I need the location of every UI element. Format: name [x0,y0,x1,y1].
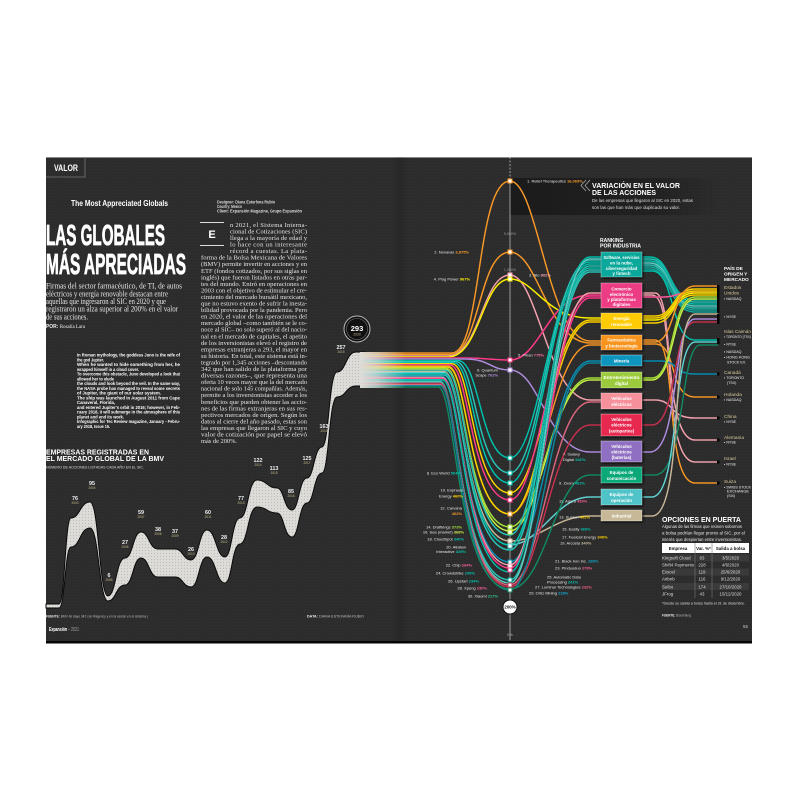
article text: lo hace con un interesante [230,242,307,249]
chart value labels: 125 [302,456,312,462]
table: upcoming listings: Exscel [662,570,675,575]
article text: pectivos mercados de orígen. Según los [201,412,307,419]
country and market labels: EXCHANGE [727,490,750,494]
table: upcoming listings: Empresa [669,546,688,551]
credits text: Designer: Diana Esterlona Rubio [217,200,275,204]
chart value labels: 76 [72,496,78,502]
article text: forma de la Bolsa Mexicana de Valores [201,255,307,262]
title [46,220,186,281]
article text: (BMV) permite invertir en acciones y en [201,261,308,268]
company labels: 29. Ortiz Mining 228% [529,590,569,596]
article text: oferta 10 veces mayor que la del mercado [201,379,307,386]
chart heading: NÚMERO DE ACCIONES LISTADAS CADA AÑO EN EL SIC. [46,464,144,470]
heading: opciones en puerta: Algunas de las firmas que reúnen sobornos [662,524,743,529]
heading: opciones en puerta: interés que despiertan entre inversionistas. [662,537,742,542]
company labels: 13. Sunrun 402% [559,514,590,520]
table: upcoming listings: 27/10/2020 [720,585,742,590]
box: software: Software, servicios [604,255,640,260]
chart value labels: 2014 [254,463,262,467]
credits text: Client: Expansión Magazine, Grupo Expansión [217,208,302,214]
box: farmaceutica: Farmacéutica [607,338,636,342]
article text: inglés) que fueron listados en otras par- [201,274,307,281]
article text: cimiento del mercado bursátil mexicano, [201,294,307,301]
chart value labels: 2015 [270,471,278,475]
company labels: 17. Fuelcell Energy 340% [562,534,608,540]
box: comercio: digitales [613,302,631,307]
company labels: 30. Xiaomi 217% [468,594,498,598]
article text: ETF (fondos cotizados, por sus siglas en [201,268,308,275]
box: equipos de operacion: operación [611,498,632,503]
table: upcoming listings: 174 [698,585,706,590]
standfirst text: eléctricos y energía renovable destacan entre [46,290,168,298]
note text block: and entered Jupiter's orbit in 2016; however, in Feb- [77,405,181,410]
article text: las empresas que llegaron al SIC y cuyo [201,425,307,432]
company labels: 5. Pinan 775% [518,352,544,358]
chart value labels: 27 [122,540,128,546]
flow lines: industries to countries [642,257,718,516]
article text: su historia. En total, este sistema está in- [201,353,307,360]
article text: datos al cierre del año pasado, estas son [201,418,308,425]
article text: récord a cuestas. La plata- [230,248,307,255]
article text: tegrado por 1,345 acciones –descontando [201,360,307,366]
heading: variación en el valor: son las que han más que duplicado su valor. [592,205,680,211]
heading: pais de origen y mercado [724,264,749,283]
table: upcoming listings: 83 [700,556,705,561]
box: vehiculos baterias: (baterías) [612,455,632,460]
box: software [601,252,642,277]
company labels: 7. Galaxy [563,452,580,456]
area chart: companies registered per year [46,352,366,608]
box: energia: Energía [613,316,630,321]
credits text: Country: Mexico [217,204,242,209]
country and market labels: Islas Caimán [724,329,751,335]
table: upcoming listings: 228 [698,563,706,568]
box: industrial [601,510,642,521]
table: upcoming listings: 9/12/2020 [721,577,741,582]
company labels: 28. Xpeng 230% [457,586,487,590]
chart heading: EL MERCADO GLOBAL DE LA BMV [46,456,164,463]
note text block: the god Jupiter. [77,357,104,362]
chart value labels: 2010 [187,552,195,556]
chart sources: FUENTE: BMV de dayo 342 con Ragency y en la sesión en el sistema.) [46,614,149,618]
chart value labels: 37 [172,529,178,535]
company labels [423,178,608,598]
chart value labels: 6 [108,573,110,579]
chart value labels: 26 [188,547,194,553]
note text block: allowed her to elude [77,376,114,381]
company labels: 10. Enphase [441,488,464,492]
company labels: Energy 460% [439,494,463,498]
chart value labels: 2012 [220,540,228,544]
company labels: 23. Pinduoduo 279% [555,566,593,570]
note text block: the clouds and look beyond the veil. In the same way, [77,381,180,386]
standfirst text [46,282,182,322]
country and market labels: ▪ NYSE [724,342,737,346]
chart value labels: 2005 [105,578,113,582]
heading: pais de origen y mercado: MERCADO [724,277,749,283]
industry boxes [601,252,642,521]
table: upcoming listings: Shift4 Payments [662,563,695,568]
chart value labels: 2007 [137,515,145,519]
table: upcoming listings [662,543,749,598]
heading: opciones en puerta: OPCIONES EN PUERTA [662,517,741,524]
table footnote: *Desde su salida a bolsa hasta el 31 de diciembre. [662,600,745,606]
section tab: VALOR [46,157,85,177]
box: equipos de comunicacion [601,467,642,483]
heading: pais de origen y mercado: PAÍS DE [724,264,744,272]
table source: FUENTE: Bloomberg [662,612,691,618]
company labels: 18. CloudSpot 340% [427,536,464,542]
note text block: The ship was launched in August 2011 from Cape [77,395,181,400]
article text: n 2021, el Sistema Interna- [230,222,307,229]
box: equipos de comunicacion: Equipos de [610,470,634,475]
box: software: y fintech [612,271,631,276]
chart value labels: 28 [221,535,227,541]
box: energia: renovable [611,322,632,327]
chart value labels: 2009 [171,534,179,538]
company labels: 22. Chip 264% [446,562,472,568]
heading: ranking por industria: POR INDUSTRIA [600,244,641,250]
table: upcoming listings: Airbnb [662,577,675,582]
chart value labels: 95 [89,481,95,487]
article text: nal en el mercado de capitales, el apetito [201,333,307,340]
country and market labels: ▪ SWISS STOCK [724,486,752,490]
box: vehiculos electricos [601,393,642,409]
country and market labels: Estados [724,285,742,291]
200% axis marker [503,600,517,614]
box: equipos de comunicacion: comunicación [607,476,637,481]
note text block: Canaveral, Florida, [77,400,115,405]
callout: 293 companies in 2020: 293 [351,324,363,333]
percentage axis: 1,000% [504,268,517,272]
company labels: Scape 762% [475,372,498,378]
article text: llega a la mayoría de edad y [230,235,308,242]
article text [201,222,308,445]
chart value labels: 60 [205,510,211,516]
box: energia [601,313,642,329]
note text block: When he wanted to hide something from her, he [77,362,181,367]
article text: noce al SIC– no solo superó al del nacio- [201,327,307,334]
country and market labels: Canadá [724,370,741,376]
table: upcoming listings: 116 [698,577,706,582]
country and market labels: ▪ NASDAQ [724,297,742,301]
drop cap E [200,222,224,246]
heading: variación en el valor: VARIACIÓN EN EL VALOR [592,181,680,190]
box: software: en la nube, [610,260,633,266]
percentage axis: 0% [507,632,513,637]
country and market labels: STOCK EX. [727,360,746,364]
article text: nes de las firmas extranjeras en sus res- [201,405,307,412]
box: comercio: Comercio [611,286,632,292]
company labels: 1. Relief Therapeutics 16,069% [527,178,583,184]
chart value labels: 122 [254,458,262,464]
box: industrial: Industrial [612,514,631,518]
country and market labels: ▪ NASDAQ [724,350,742,354]
standfirst text: aquellas que ingresaron al SIC en 2020 y que [46,297,166,306]
article text: valor de cotización por papel se elevó [201,432,307,438]
company labels: 27. Luminar Technologies 232% [535,584,592,590]
percentage axis: 5,000% [504,232,517,236]
company labels: 9. Zoom 462% [559,480,585,486]
icon: double chevron [581,180,590,191]
drop cap E: E [208,229,216,241]
chart value labels: 2011 [205,515,212,519]
company labels: Digital 542% [563,457,586,462]
box: farmaceutica [601,335,642,350]
country and market labels: (SIX) [727,494,735,498]
byline: POR: Rosalía Lara [46,324,86,330]
country and market labels: (TSX) [727,381,736,385]
chart value labels: 2017 [303,461,311,465]
box: vehiculos electricos: eléctricos [611,402,632,407]
chart value labels: 2004 [88,486,96,490]
chart value labels: 2006 [121,545,129,549]
article text: nacional de solo 145 compañías. Además, [201,386,307,393]
footer folio: Expansión – 2021 [49,627,79,633]
company nodes on axis [508,179,512,592]
company labels: 16. Sea (market) 368% [423,530,464,534]
heading: opciones en puerta [662,517,745,542]
title: LAS GLOBALES [46,220,165,252]
box: vehiculos autopartes: eléctricos [611,422,632,428]
standfirst text: de sus acciones. [46,312,88,322]
company labels: 14. Draftkings 373% [426,524,462,530]
chart sources [46,614,364,618]
heading: variación en el valor: DE LAS ACCIONES [592,190,656,197]
country and market labels: ▪ NASDAQ [724,398,742,402]
note text block: ary 2018, Issue 15. [77,424,110,429]
company labels: 12. Carvana [440,506,463,510]
article text: empresas extranjeras a 293, el mayor en [201,346,308,353]
chart value labels: 163 [320,424,328,430]
standfirst text: registraron un alza superior al 200% en el valor [46,304,178,314]
chart value labels: 2003 [71,501,79,505]
article text: cional de Cotizaciones (SIC) [230,228,307,236]
kicker: The Most Appreciated Globals: The Most Appreciated Globals [71,199,168,208]
page number: 55 [743,624,748,629]
chart value labels: 113 [270,466,278,472]
bundle fade from chart into coloured lines [360,352,406,388]
note text block: ruary 2018, it will submerge in the atmosphere of this [77,410,181,415]
box: vehiculos baterias: Vehículos [611,444,632,449]
article text: tes del mundo. Entró en operaciones en [201,281,308,288]
box: vehiculos baterias [601,441,642,462]
box: vehiculos autopartes [601,414,642,436]
chart value labels: 2008 [154,532,162,536]
chart heading: EMPRESAS REGISTRADAS EN [46,450,149,456]
country and market labels: Suiza [724,479,736,485]
table: upcoming listings: 43 [700,592,705,597]
note text block: In Roman mythology, the goddess Juno is the wife of [77,353,180,358]
table: upcoming listings: 3/5/2020 [722,556,740,561]
standfirst text: Firmas del sector farmacéutico, de TI, de autos [46,282,182,290]
note text block: Infographic for Tec Review magazine, January - Febru- [77,419,180,424]
box: mineria [601,355,642,366]
chart value labels: 257 [336,345,346,351]
company labels: 20. Atlatian [446,544,466,550]
chart value labels: 38 [155,527,161,533]
table: upcoming listings: Var. %* [696,546,711,551]
chart value labels: 2019 [337,350,345,354]
heading: pais de origen y mercado: ORIGEN Y [724,272,748,278]
table: upcoming listings: 15/12/2020 [720,592,742,597]
note text block: planet and end its work. [77,414,124,419]
country and market labels: Israel [724,456,736,462]
article text: más de 200%. [201,438,237,445]
box: software: ciberseguridad [606,266,638,271]
note text block: the NASA probe has managed to reveal some secrets [77,386,181,391]
chart value labels: 2013 [237,501,245,505]
table: upcoming listings: Seibo [662,585,674,590]
company labels: 26. Upstart 234% [448,578,479,584]
note text block: of Jupiter, the giant of our solar system. [77,391,161,396]
box: equipos de operacion: Equipos de [610,492,634,497]
article text: 2003 con el objetivo de estimular el cre- [201,287,307,294]
heading: variación en el valor [592,181,694,211]
company labels: 402% [452,511,462,516]
article text: de los inversionistas elevó el registro de [201,340,307,347]
article text: mercado global –como también se le co- [201,320,307,327]
company labels: 21. Black Iron Inc. 280% [555,558,599,564]
company labels: 3. Nio 802% [529,272,551,278]
callout: 293 companies in 2020: 2020 [353,332,361,336]
heading: ranking por industria: RANKING [600,238,623,244]
chart value labels [71,345,346,582]
note text block: wrapped himself in a cloud cover. [76,367,139,372]
box: entretenimiento: digital [615,381,628,386]
heading: variación en el valor: De las empresas que llegaron al SIC en 2020, estas [592,198,694,204]
box: entretenimiento: Entretenimiento [604,375,640,380]
country and market labels: ▪ NYSE [724,462,737,466]
company labels: 15. Easily 366% [562,526,591,532]
title: MÁS APRECIADAS [46,247,186,281]
box: mineria: Minería [614,358,630,364]
table: upcoming listings: 119 [698,570,706,575]
box: vehiculos baterias: eléctricos [611,450,632,454]
country and market labels: ▪ NYSE [724,420,737,424]
box: vehiculos electricos: Vehículos [611,396,632,401]
country and market labels: ▪ NYSE [724,315,737,319]
company labels: 4. Plug Power 967% [434,276,470,282]
company labels: 8. Eco World 504% [427,470,461,476]
chart sources: DATA: DIANA ESTEFANÍA RUBIO [307,614,364,618]
table: upcoming listings: Kingsoft Cloud [662,556,691,561]
country and market labels: China [724,414,737,420]
article text: permite a los inversionistas acceder a los [201,392,307,399]
country and market labels: ▪ NYSE [724,440,737,444]
chart value labels: 77 [238,496,244,502]
box: vehiculos autopartes: Vehículos [611,417,632,422]
article text: 342 que han salido de la plataforma por [201,366,308,373]
country end markers [717,285,720,484]
panel: variation heading backdrop [510,178,720,215]
section tab: VALOR: VALOR [54,163,78,173]
box: comercio [601,283,642,308]
box: comercio: y plataformas [607,297,636,302]
box: entretenimiento [601,372,642,388]
table: upcoming listings: Salida a bolsa [716,546,746,551]
200% axis marker: 200% [504,605,516,610]
article text: bilidad provocada por la pandemia. Pero [201,307,307,314]
note text block [76,353,181,429]
article text: que no estuvo exento de sufrir la inesta- [201,300,307,308]
country and market labels: ▪ TORONTO (TSX) [724,335,751,339]
chart value labels: 2016 [287,494,295,498]
chart value labels: 85 [288,489,294,495]
country and market labels: ▪ HONG KONG [724,356,750,360]
table: upcoming listings: JFrog [662,592,674,597]
chart value labels: 2018 [320,429,328,433]
note text block: To overcome this obstacle, Juno developed a look that [77,372,180,377]
company labels: 24. Crowdstrike 249% [436,570,475,576]
percentage axis [504,157,517,640]
heading: opciones en puerta: a bolsa podrían llegar pronto al SIC, por el [662,530,745,536]
country and market labels: Alemania [724,435,744,441]
article text: en 2020, el valor de las operaciones del [201,314,307,321]
callout: 293 companies in 2020 [344,316,370,342]
box: vehiculos autopartes: (autopartes) [609,428,635,434]
flow lines: companies to industries [360,181,601,590]
article text: beneficios que pueden obtener las accio- [201,399,307,406]
table: upcoming listings: 4/6/2020 [722,563,740,568]
company labels: 25. Automatic Data [547,574,582,580]
chart value labels: 59 [138,510,144,516]
company labels: 11. Agora 439% [559,498,588,504]
company labels: 2. Novavax 3,875% [434,250,469,254]
country and market labels: Unidos [724,290,740,296]
country and market labels: ▪ TORONTO [724,376,744,380]
country and market labels: Holanda [724,392,742,398]
country and market labels [724,285,752,498]
chart heading [46,450,164,470]
box: equipos de operacion [601,489,642,505]
company labels: Processing 241% [547,580,579,584]
table: upcoming listings: 25/6/2020 [721,570,741,575]
article text: diversas razones–, que representa una [201,373,307,380]
credits text [217,200,302,214]
box: farmaceutica: y biotecnología [605,344,638,348]
company labels: 19. Arcosta 340% [560,540,592,546]
company labels: Interactive 329% [436,549,466,554]
heading: ranking por industria [600,238,641,250]
box: comercio: electrónico [610,292,634,297]
panel: magazine spread background [46,157,752,644]
company labels: 6. Quantum [477,368,499,372]
